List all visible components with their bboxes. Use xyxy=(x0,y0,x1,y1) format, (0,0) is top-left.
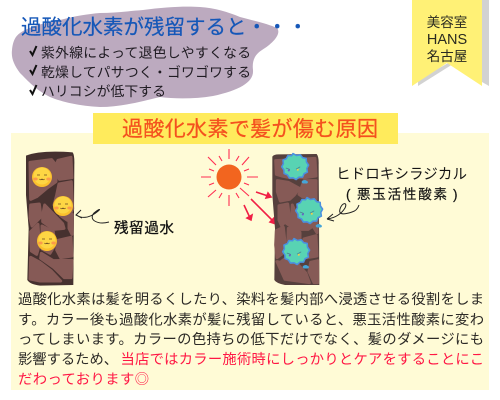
arrows: sun rays xyxy=(244,192,276,224)
label: hydroxyl radical: ヒドロキシラジカル xyxy=(336,167,467,183)
label: hydroxyl radical: ) xyxy=(453,187,458,202)
text block: explanation: す。カラー後も過酸化水素が髪に残留していると、悪玉活性酸素に変わ xyxy=(18,312,484,328)
icon: sun xyxy=(201,149,258,206)
heading: blob title: 過酸化水素が残留すると・・・ xyxy=(21,16,308,39)
list: effects: ハリコシが低下する xyxy=(41,84,166,99)
heading banner xyxy=(93,113,398,144)
icon: smiley 1 xyxy=(32,167,52,187)
heading banner: 過酸化水素で髪が傷む原因 xyxy=(122,118,378,141)
label: residual water: 残留過水 xyxy=(114,220,174,237)
icon: radical 2 xyxy=(296,198,323,228)
text block: explanation: だわっております◎ xyxy=(18,371,149,388)
icon: radical 3 xyxy=(283,239,310,268)
hair: radicals xyxy=(272,154,323,285)
hair: residual water xyxy=(26,152,74,286)
list: effects xyxy=(30,46,251,99)
text block: explanation: 過酸化水素は髪を明るくしたり、染料を髪内部へ浸透させる役割をしま xyxy=(18,291,484,308)
arrow: residual water xyxy=(76,209,109,223)
text block: explanation xyxy=(18,291,484,388)
ribbon text xyxy=(427,14,467,64)
label: hydroxyl radical: ( xyxy=(346,187,351,202)
ribbon text: 美容室 xyxy=(427,14,467,30)
arrow: radical xyxy=(327,204,359,221)
ribbon text: HANS xyxy=(427,32,467,48)
list: effects: 紫外線によって退色しやすくなる xyxy=(41,46,251,60)
list: effects: 乾燥してパサつく・ゴワゴワする xyxy=(41,64,251,80)
text block: explanation: ってしまいます。カラーの色持ちの低下だけでなく、髪のダメージにも xyxy=(18,331,484,348)
background panel xyxy=(11,133,489,390)
icon: smiley 2 xyxy=(53,196,73,216)
icon: radical 1 xyxy=(282,154,309,184)
label: hydroxyl radical: 悪玉活性酸素 xyxy=(357,187,447,202)
text block: explanation: 当店ではカラー施術時にしっかりとケアをすることにこ xyxy=(120,351,484,368)
text block: explanation: 影響するため、 xyxy=(18,351,118,368)
ribbon badge xyxy=(412,0,489,86)
label: hydroxyl radical xyxy=(336,167,467,202)
icon: smiley 3 xyxy=(37,231,57,251)
ribbon text: 名古屋 xyxy=(427,49,467,64)
panel: warning blob xyxy=(12,7,308,107)
